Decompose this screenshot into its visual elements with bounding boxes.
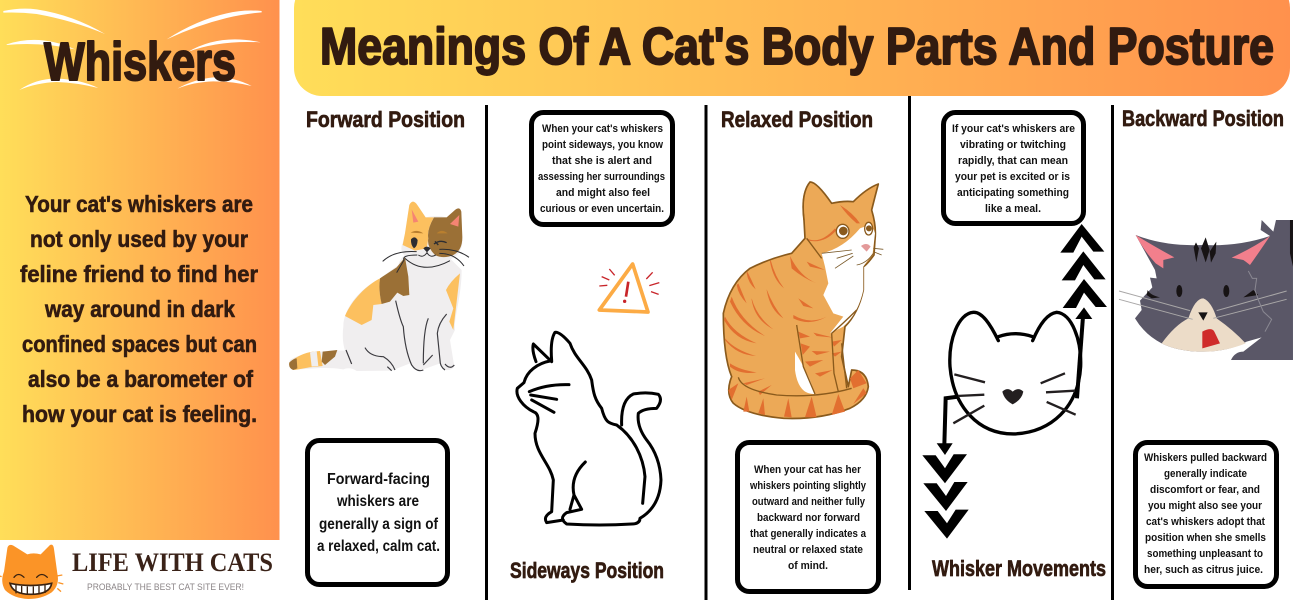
illustration: grey cat with flattened whiskers (1119, 220, 1293, 360)
relaxed description: that generally indicates a (750, 528, 867, 540)
sidebar description: way around in dark (44, 296, 235, 322)
relaxed description: neutral or relaxed state (753, 544, 863, 556)
backward description: cat's whiskers adopt that (1146, 516, 1265, 528)
sidebar description: confined spaces but can (22, 331, 257, 357)
sideways description: that she is alert and (552, 155, 652, 167)
sideways description: curious or even uncertain. (540, 203, 664, 215)
whisker movements description (952, 123, 1075, 215)
arrow: whisker down (922, 397, 969, 539)
whisker movements description: your pet is excited or is (955, 171, 1070, 183)
forward description: whiskers are (336, 493, 419, 510)
heading: whisker movements: Whisker Movements (932, 556, 1106, 581)
heading: sideways position: Sideways Position (510, 558, 664, 583)
backward description: you might also see your (1148, 500, 1263, 512)
whisker movements description: rapidly, that can mean (958, 155, 1068, 167)
panel: whiskers sidebar (0, 0, 280, 540)
text box: sideways (532, 112, 672, 224)
sidebar description: Your cat's whiskers are (25, 191, 253, 217)
panel: relaxed position (721, 107, 883, 592)
illustration: cat outline (517, 332, 661, 525)
sidebar description: feline friend to find her (20, 261, 258, 287)
backward description: Whiskers pulled backward (1144, 452, 1267, 464)
sidebar description: how your cat is feeling. (22, 401, 257, 427)
relaxed description: of mind. (788, 560, 828, 572)
forward description: Forward-facing (327, 471, 430, 488)
relaxed description: backward nor forward (757, 512, 860, 524)
text box: whisker movements (944, 112, 1084, 224)
sideways description: assessing her surroundings (538, 171, 665, 183)
icon: warning triangle (599, 264, 659, 312)
sidebar description: not only used by your (30, 226, 248, 252)
text box: backward (1136, 442, 1276, 586)
backward description: her, such as citrus juice. (1144, 564, 1263, 576)
text box: forward (308, 440, 448, 584)
panel: forward position (289, 107, 469, 584)
relaxed description: When your cat has her (754, 464, 862, 476)
relaxed description: outward and neither fully (752, 496, 866, 508)
backward description: position when she smells (1145, 532, 1266, 544)
forward description: a relaxed, calm cat. (317, 538, 440, 555)
whisker movements description: like a meal. (985, 203, 1041, 215)
heading: forward position: Forward Position (306, 107, 465, 132)
sideways description: and might also feel (556, 187, 650, 199)
whisker movements description: If your cat's whiskers are (952, 123, 1075, 135)
panel: sideways position (510, 112, 672, 583)
sidebar description (20, 191, 258, 427)
backward description: generally indicate (1164, 468, 1247, 480)
relaxed description: whiskers pointing slightly (749, 480, 867, 492)
sidebar description: also be a barometer of (28, 366, 253, 392)
backward description: discomfort or fear, and (1150, 484, 1260, 496)
text box: relaxed (738, 442, 878, 592)
sideways description: When your cat's whiskers (542, 123, 663, 135)
backward description (1144, 452, 1267, 576)
illustration: calico cat (289, 202, 469, 371)
forward description: generally a sign of (319, 516, 439, 533)
arrow: whisker up (1060, 224, 1107, 398)
whisker movements description: vibrating or twitching (960, 139, 1066, 151)
illustration: cat face with whisker arrows (922, 224, 1107, 539)
heading: relaxed position: Relaxed Position (721, 107, 873, 132)
sidebar heading: Whiskers (44, 32, 236, 92)
title banner (294, 0, 1290, 96)
relaxed description (749, 464, 867, 572)
whisker movements description: anticipating something (957, 187, 1069, 199)
backward description: something unpleasant to (1147, 548, 1263, 560)
illustration: orange tabby cat (723, 182, 883, 419)
sideways description: point sideways, you know (542, 139, 663, 151)
icon: grinning orange cat (0, 545, 63, 599)
logo tagline: PROBABLY THE BEST CAT SITE EVER! (87, 582, 244, 592)
logo wordmark: LIFE WITH CATS (72, 548, 273, 577)
logo: Life With Cats (0, 545, 273, 599)
sideways description (538, 123, 665, 215)
icon: decorative white whiskers (3, 9, 262, 90)
panel: backward position (1119, 106, 1293, 586)
forward description (317, 471, 440, 555)
panel: whisker movements (922, 112, 1107, 581)
